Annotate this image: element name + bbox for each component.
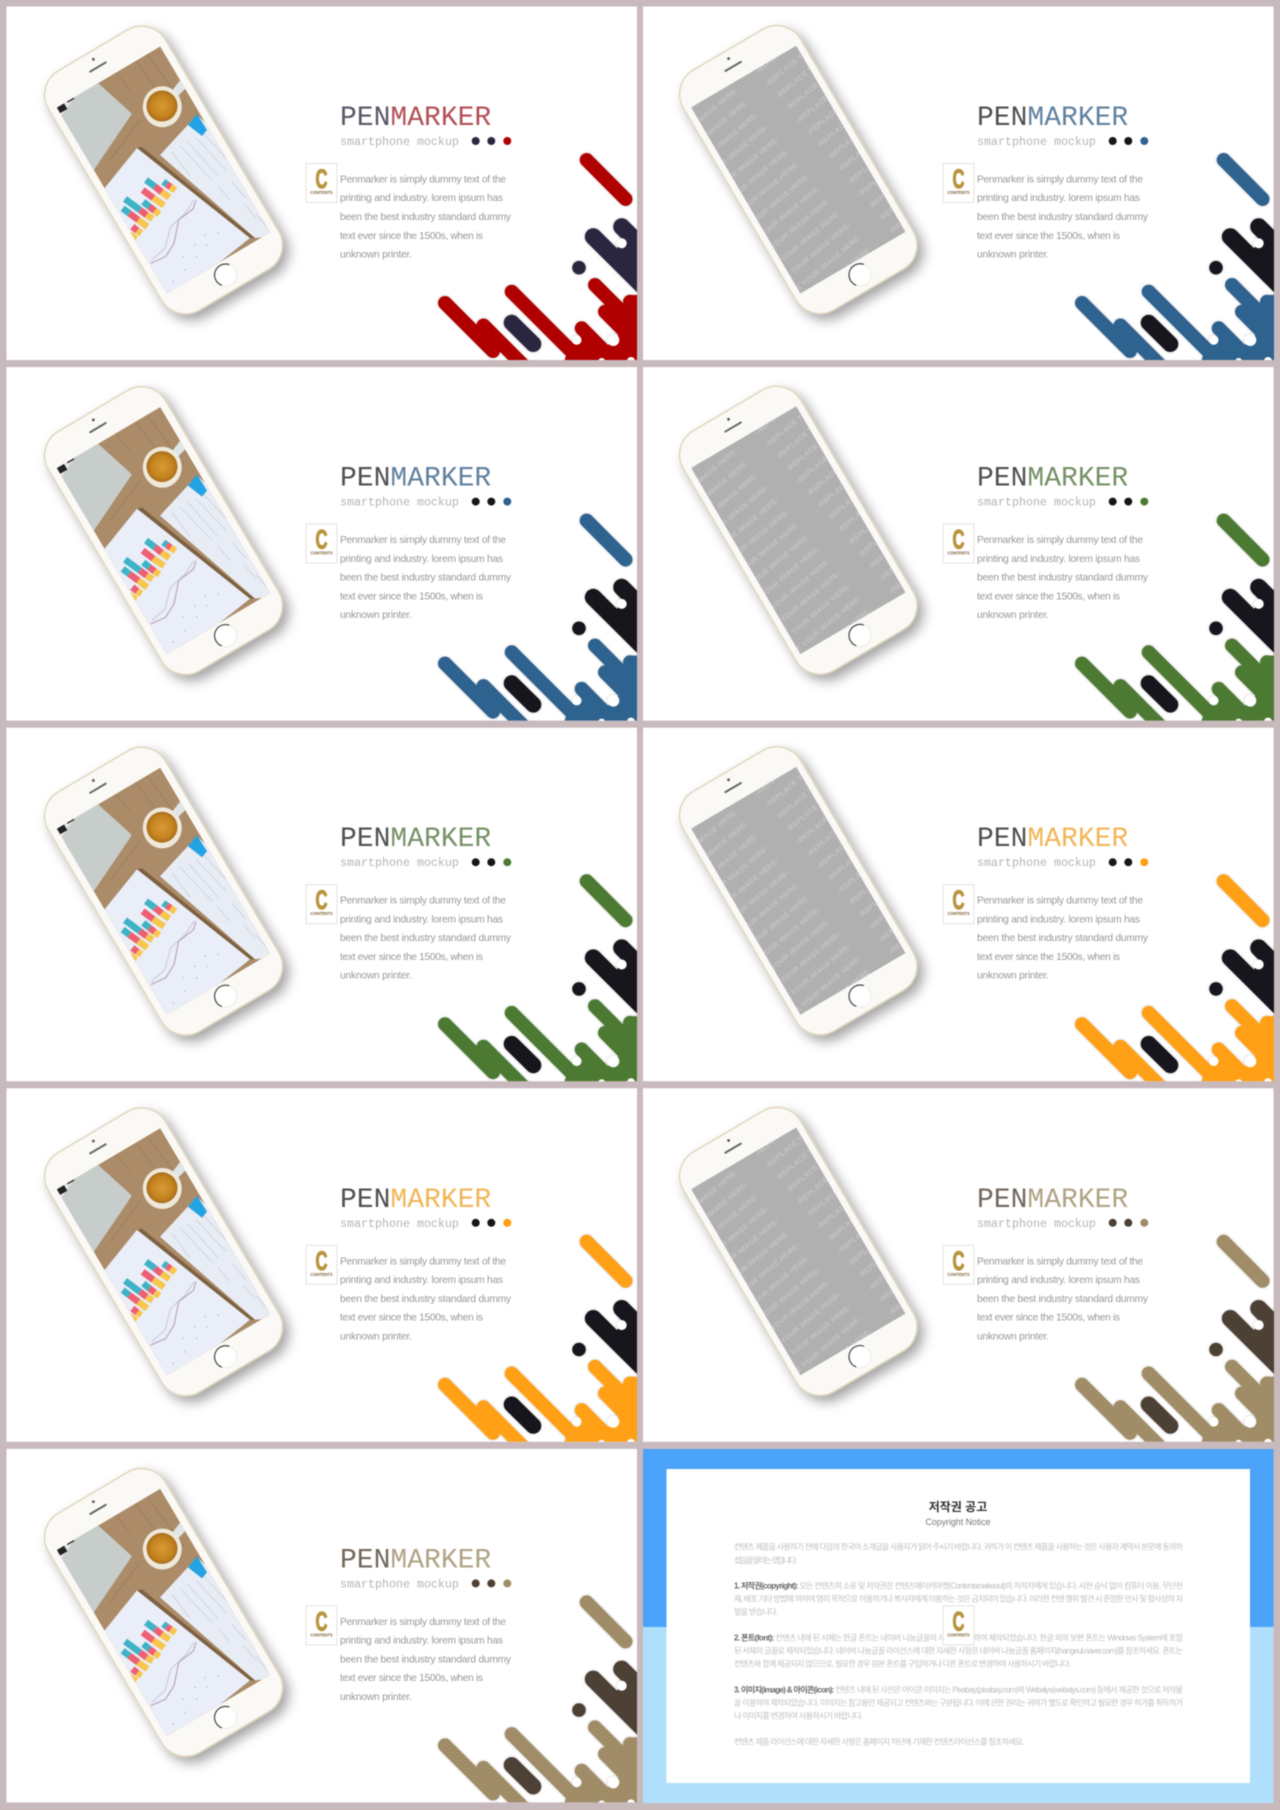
phone with photo [34, 16, 293, 324]
phone with placeholder screen: -REPLACE YOUR IMAGE HERE- [655, 1179, 750, 1261]
logo: CONTENTS [948, 1272, 970, 1277]
phone with placeholder screen: -REPLACE YOUR IMAGE HERE- [897, 887, 993, 969]
title: PENMARKER [340, 824, 491, 855]
body text: unknown printer. [340, 1692, 412, 1703]
body text: text ever since the 1500s, when is [340, 952, 483, 963]
copyright intro [734, 1542, 1184, 1565]
phone with placeholder screen: -REPLACE YOUR IMAGE HERE- [856, 477, 951, 559]
phone with placeholder screen: -REPLACE YOUR IMAGE HERE- [815, 789, 910, 871]
phone with placeholder screen: -REPLACE YOUR IMAGE HERE- [686, 1216, 781, 1298]
logo: CONTENTS [948, 911, 970, 916]
phone with placeholder screen: -REPLACE YOUR IMAGE HERE- [778, 244, 874, 327]
body text: text ever since the 1500s, when is [977, 1313, 1120, 1324]
section 1 copyright [734, 1580, 1183, 1616]
body text: printing and industry. lorem ipsum has [340, 914, 503, 925]
decorative pen strokes [445, 521, 671, 736]
phone with placeholder screen: -REPLACE YOUR IMAGE HERE- [634, 794, 730, 876]
logo [306, 1245, 337, 1284]
phone with placeholder screen: -REPLACE YOUR IMAGE HERE- [675, 1204, 771, 1286]
phone with placeholder screen: -REPLACE YOUR IMAGE HERE- [887, 514, 982, 596]
phone with placeholder screen: -REPLACE YOUR IMAGE HERE- [768, 593, 863, 675]
subtitle: smartphone mockup [340, 135, 459, 149]
phone with placeholder screen: -REPLACE YOUR IMAGE HERE- [655, 458, 750, 540]
phone with placeholder screen: -REPLACE YOUR IMAGE HERE- [877, 862, 972, 944]
phone with placeholder screen: -REPLACE YOUR IMAGE HERE- [825, 801, 921, 883]
body text: printing and industry. lorem ipsum has [977, 554, 1140, 565]
body text: Penmarker is simply dummy text of the [340, 1256, 506, 1267]
phone with placeholder screen: -REPLACE YOUR IMAGE HERE- [778, 966, 874, 1048]
phone with placeholder screen: -REPLACE YOUR IMAGE HERE- [768, 953, 863, 1036]
phone with placeholder screen: -REPLACE YOUR IMAGE HERE- [696, 868, 791, 950]
logo: CONTENTS [310, 1272, 332, 1277]
colour dots [1109, 137, 1148, 145]
phone with placeholder screen: -REPLACE YOUR IMAGE HERE- [877, 1223, 972, 1305]
phone with placeholder screen: -REPLACE YOUR IMAGE HERE- [757, 581, 853, 663]
section 1 copyright: 재, 배포 기타 방법에 의하여 영리 목적으로 이용하거나 복사자에게 이용하는 것은 금지되어 있습니다. 이러한 컨텐 행위 발견 시 준엄한 민사 및 형사상의 처 [734, 1594, 1183, 1604]
panel: copyright notice [643, 1449, 1274, 1803]
title: PENMARKER [340, 1545, 491, 1576]
phone with placeholder screen: -REPLACE YOUR IMAGE HERE- [763, 367, 859, 449]
body text: been the best industry standard dummy [340, 573, 512, 584]
body text: text ever since the 1500s, when is [340, 231, 483, 242]
body text: been the best industry standard dummy [340, 1294, 512, 1305]
phone with placeholder screen: -REPLACE YOUR IMAGE HERE- [727, 183, 822, 265]
logo: C [952, 525, 964, 555]
phone with placeholder screen: -REPLACE YOUR IMAGE HERE- [877, 502, 972, 584]
body text [340, 896, 512, 982]
body text: unknown printer. [340, 250, 412, 260]
body text: unknown printer. [340, 610, 412, 621]
colour dots [472, 858, 511, 866]
phone with placeholder screen: -REPLACE YOUR IMAGE HERE- [727, 1265, 822, 1347]
body text: printing and industry. lorem ipsum has [340, 554, 503, 565]
section 3 image and icon: 을 이용하여 제작되었습니다. 이미지는 참고용만 제공되고 컨텐츠와는 구분됩니다. 이에 관한 권리는 귀하가 별도로 확인하고 필요한 경우 허가를 취득하거 [734, 1698, 1183, 1708]
panel: slide 3 blue photo [6, 367, 671, 736]
logo [943, 1245, 974, 1284]
logo: C [316, 1246, 328, 1276]
phone with placeholder screen: -REPLACE YOUR IMAGE HERE- [696, 146, 791, 229]
section 1 copyright: 1. 저작권(copyright): 모든 컨텐츠의 소유 및 저작권은 컨텐츠메이커마켓(Contentsmakeout)의 저작자에게 있습니다. 사전 승낙 없이 컴퓨터 이용, 무단전 [734, 1580, 1183, 1590]
subtitle: smartphone mockup [977, 856, 1096, 870]
phone with placeholder screen: -REPLACE YOUR IMAGE HERE- [784, 31, 879, 113]
body text: been the best industry standard dummy [977, 933, 1149, 944]
phone with placeholder screen: -REPLACE YOUR IMAGE HERE- [763, 727, 859, 809]
panel: slide 5 green photo [6, 728, 671, 1096]
body text [977, 896, 1149, 982]
phone with photo [34, 376, 293, 685]
phone with placeholder screen: -REPLACE YOUR IMAGE HERE- [665, 1191, 760, 1274]
logo [943, 885, 974, 924]
phone with placeholder screen: -REPLACE YOUR IMAGE HERE- [644, 1167, 740, 1249]
body text [977, 174, 1149, 260]
phone with placeholder screen: -REPLACE YOUR IMAGE HERE- [778, 605, 874, 687]
body text [977, 535, 1149, 621]
body text [340, 1617, 512, 1703]
phone with placeholder screen: -REPLACE YOUR IMAGE HERE- [877, 141, 972, 223]
phone with placeholder screen: -REPLACE YOUR IMAGE HERE- [747, 929, 843, 1011]
logo: CONTENTS [310, 190, 332, 195]
decorative pen strokes [445, 160, 671, 375]
phone with placeholder screen: -REPLACE YOUR IMAGE HERE- [784, 1112, 879, 1195]
phone with placeholder screen: -REPLACE YOUR IMAGE HERE- [788, 978, 884, 1060]
phone with placeholder screen: -REPLACE YOUR IMAGE HERE- [686, 495, 781, 577]
phone with placeholder screen: -REPLACE YOUR IMAGE HERE- [757, 1302, 853, 1384]
body text [340, 535, 512, 621]
logo: CONTENTS [310, 551, 332, 556]
body text: been the best industry standard dummy [977, 1294, 1149, 1305]
phone with placeholder screen: -REPLACE YOUR IMAGE HERE- [778, 1326, 874, 1408]
title: PENMARKER [340, 103, 491, 134]
body text: printing and industry. lorem ipsum has [977, 1275, 1140, 1286]
phone with placeholder screen: -REPLACE YOUR IMAGE HERE- [686, 855, 781, 938]
phone with placeholder screen: -REPLACE YOUR IMAGE HERE- [675, 482, 771, 565]
phone with placeholder screen: -REPLACE YOUR IMAGE HERE- [805, 55, 900, 137]
body text: printing and industry. lorem ipsum has [340, 1636, 503, 1647]
phone with placeholder screen: -REPLACE YOUR IMAGE HERE- [788, 617, 884, 699]
phone with placeholder screen: -REPLACE YOUR IMAGE HERE- [784, 752, 879, 834]
body text: text ever since the 1500s, when is [977, 952, 1120, 963]
phone with placeholder screen: -REPLACE YOUR IMAGE HERE- [753, 1076, 849, 1158]
body text: unknown printer. [977, 610, 1049, 621]
title: PENMARKER [977, 103, 1128, 134]
phone with placeholder screen: -REPLACE YOUR IMAGE HERE- [856, 1198, 951, 1280]
subtitle: smartphone mockup [340, 856, 459, 870]
phone with placeholder screen: -REPLACE YOUR IMAGE HERE- [815, 67, 910, 150]
phone with placeholder screen: -REPLACE YOUR IMAGE HERE- [757, 941, 853, 1023]
subtitle: smartphone mockup [977, 1217, 1096, 1231]
logo [943, 164, 974, 202]
phone with placeholder screen: -REPLACE YOUR IMAGE HERE- [727, 544, 822, 626]
phone with placeholder screen: -REPLACE YOUR IMAGE HERE- [815, 428, 910, 510]
phone with placeholder screen: -REPLACE YOUR IMAGE HERE- [805, 776, 900, 858]
phone with placeholder screen: -REPLACE YOUR IMAGE HERE- [846, 465, 941, 547]
phone with placeholder screen: -REPLACE YOUR IMAGE HERE- [665, 831, 760, 913]
copyright subheading: Copyright Notice [925, 1517, 991, 1527]
body text: Penmarker is simply dummy text of the [977, 1256, 1143, 1267]
body text: Penmarker is simply dummy text of the [340, 535, 506, 546]
body text: been the best industry standard dummy [977, 573, 1149, 584]
phone with placeholder screen: -REPLACE YOUR IMAGE HERE- [737, 195, 832, 278]
phone with placeholder screen: -REPLACE YOUR IMAGE HERE- [737, 556, 832, 638]
phone with placeholder screen: -REPLACE YOUR IMAGE HERE- [675, 843, 771, 925]
phone with placeholder screen: -REPLACE YOUR IMAGE HERE- [866, 489, 962, 571]
phone with placeholder screen: -REPLACE YOUR IMAGE HERE- [794, 403, 890, 486]
closing note: 컨텐츠 제품 라이선스에 대한 자세한 사항은 홈페이지 하단에 기재한 컨텐츠라이선스를 참조하세요. [734, 1736, 1024, 1746]
phone with placeholder screen: -REPLACE YOUR IMAGE HERE- [887, 153, 982, 235]
decorative pen strokes [1082, 1242, 1280, 1457]
logo: C [316, 164, 328, 194]
phone with placeholder screen: -REPLACE YOUR IMAGE HERE- [727, 904, 822, 987]
decorative pen strokes [1082, 160, 1280, 375]
phone with placeholder screen: -REPLACE YOUR IMAGE HERE- [763, 6, 859, 88]
section 2 font: 컨텐츠와 함께 제공되지 않으므로, 필요한 경우 원본 폰트를 구입하거나 다른 폰트로 변경하여 사용하시기 바랍니다. [734, 1658, 1071, 1668]
colour dots [1109, 858, 1148, 866]
phone with placeholder screen: -REPLACE YOUR IMAGE HERE- [794, 1125, 890, 1207]
phone with placeholder screen: -REPLACE YOUR IMAGE HERE- [634, 73, 730, 155]
phone with placeholder screen: -REPLACE YOUR IMAGE HERE- [753, 354, 849, 437]
phone with placeholder screen: -REPLACE YOUR IMAGE HERE- [887, 1235, 982, 1317]
logo [943, 1606, 974, 1645]
phone with placeholder screen: -REPLACE YOUR IMAGE HERE- [716, 1253, 812, 1335]
logo: C [316, 885, 328, 915]
phone with placeholder screen: -REPLACE YOUR IMAGE HERE- [835, 1174, 931, 1256]
logo: CONTENTS [948, 1632, 970, 1637]
body text: Penmarker is simply dummy text of the [977, 896, 1143, 907]
phone with placeholder screen: -REPLACE YOUR IMAGE HERE- [866, 850, 962, 932]
panel: slide 2 blue placeholder [642, 6, 1275, 361]
colour dots [472, 137, 511, 145]
logo: CONTENTS [948, 551, 970, 556]
phone with placeholder screen [678, 1106, 930, 1409]
phone with placeholder screen: -REPLACE YOUR IMAGE HERE- [743, 1063, 838, 1146]
logo [306, 885, 337, 924]
phone with placeholder screen: -REPLACE YOUR IMAGE HERE- [774, 379, 869, 461]
body text: Penmarker is simply dummy text of the [340, 174, 506, 186]
panel: slide 8 tan placeholder [642, 1088, 1275, 1442]
decorative pen strokes [445, 1242, 671, 1457]
phone with photo [34, 1458, 293, 1767]
body text: Penmarker is simply dummy text of the [977, 174, 1143, 186]
phone with photo [34, 1098, 293, 1406]
phone with placeholder screen: -REPLACE YOUR IMAGE HERE- [866, 129, 962, 211]
phone with placeholder screen: -REPLACE YOUR IMAGE HERE- [665, 110, 760, 192]
phone with placeholder screen: -REPLACE YOUR IMAGE HERE- [768, 232, 863, 314]
phone with placeholder screen: -REPLACE YOUR IMAGE HERE- [835, 453, 931, 535]
title: PENMARKER [977, 824, 1128, 855]
phone with placeholder screen: -REPLACE YOUR IMAGE HERE- [846, 104, 941, 186]
body text: printing and industry. lorem ipsum has [977, 914, 1140, 925]
subtitle: smartphone mockup [340, 1217, 459, 1231]
decorative pen strokes [1082, 521, 1280, 736]
phone with placeholder screen: -REPLACE YOUR IMAGE HERE- [897, 1247, 993, 1329]
phone with placeholder screen: -REPLACE YOUR IMAGE HERE- [784, 391, 879, 473]
copyright intro: 셨음을 알리는 것입니다. [734, 1555, 797, 1565]
phone with placeholder screen: -REPLACE YOUR IMAGE HERE- [805, 1137, 900, 1219]
section 2 font: 2. 폰트(font): 컨텐츠 내에 된 서체는 한글 폰트는 네이버 나눔글꼴의 서체를 사용하여 제작되었습니다. 한글 외의 보편 폰트는 Windows System에 포함 [734, 1632, 1184, 1642]
phone with placeholder screen: -REPLACE YOUR IMAGE HERE- [737, 917, 832, 999]
decorative pen strokes [1082, 881, 1280, 1096]
phone with placeholder screen [678, 384, 930, 688]
logo: CONTENTS [310, 1632, 332, 1637]
colour dots [1109, 498, 1148, 506]
body text: unknown printer. [977, 971, 1049, 982]
phone with placeholder screen: -REPLACE YOUR IMAGE HERE- [856, 838, 951, 920]
phone with placeholder screen: -REPLACE YOUR IMAGE HERE- [686, 134, 781, 216]
body text: printing and industry. lorem ipsum has [977, 193, 1140, 204]
body text: text ever since the 1500s, when is [340, 1313, 483, 1324]
phone with placeholder screen: -REPLACE YOUR IMAGE HERE- [634, 433, 730, 516]
body text: been the best industry standard dummy [340, 212, 512, 223]
phone with placeholder screen: -REPLACE YOUR IMAGE HERE- [794, 43, 890, 125]
phone with placeholder screen: -REPLACE YOUR IMAGE HERE- [747, 1289, 843, 1372]
phone with placeholder screen: -REPLACE YOUR IMAGE HERE- [757, 220, 853, 302]
copyright intro: 컨텐츠 제품을 사용하기 전에 다음의 한국어 소개글을 사용자가 읽어 주시기 바랍니다. 귀하가 이 컨텐츠 제품을 사용하는 것은 사용자 계약서 본문에 동의하 [734, 1542, 1184, 1552]
body text: Penmarker is simply dummy text of the [340, 896, 506, 907]
panel: slide 1 red photo [6, 6, 671, 375]
body text [340, 1256, 512, 1342]
body text: printing and industry. lorem ipsum has [340, 1275, 503, 1286]
phone with placeholder screen: -REPLACE YOUR IMAGE HERE- [774, 18, 869, 101]
logo: C [952, 1246, 964, 1276]
phone with photo [34, 737, 293, 1045]
phone with placeholder screen: -REPLACE YOUR IMAGE HERE- [794, 764, 890, 846]
phone with placeholder screen: -REPLACE YOUR IMAGE HERE- [866, 1210, 962, 1293]
body text: unknown printer. [340, 971, 412, 982]
subtitle: smartphone mockup [340, 1577, 459, 1591]
title: PENMARKER [977, 464, 1128, 495]
subtitle: smartphone mockup [977, 135, 1096, 149]
phone with placeholder screen: -REPLACE YOUR IMAGE HERE- [716, 532, 812, 614]
phone with placeholder screen: -REPLACE YOUR IMAGE HERE- [825, 80, 921, 162]
body text: been the best industry standard dummy [340, 1654, 512, 1665]
phone with placeholder screen: -REPLACE YOUR IMAGE HERE- [634, 1155, 730, 1237]
phone with placeholder screen: -REPLACE YOUR IMAGE HERE- [696, 507, 791, 589]
phone with placeholder screen: -REPLACE YOUR IMAGE HERE- [706, 159, 802, 241]
body text: printing and industry. lorem ipsum has [340, 193, 503, 204]
phone with placeholder screen: -REPLACE YOUR IMAGE HERE- [753, 715, 849, 797]
phone with placeholder screen: -REPLACE YOUR IMAGE HERE- [788, 1339, 884, 1421]
logo: C [316, 1606, 328, 1636]
phone with placeholder screen: -REPLACE YOUR IMAGE HERE- [747, 208, 843, 290]
phone with placeholder screen: -REPLACE YOUR IMAGE HERE- [644, 806, 740, 888]
panel: slide 6 orange placeholder [642, 727, 1275, 1082]
logo: CONTENTS [948, 190, 970, 195]
phone with placeholder screen [678, 745, 930, 1048]
panel: slide 9 tan photo [6, 1449, 671, 1810]
phone with placeholder screen: -REPLACE YOUR IMAGE HERE- [774, 1100, 869, 1182]
phone with placeholder screen: -REPLACE YOUR IMAGE HERE- [655, 819, 750, 901]
logo: C [952, 164, 964, 194]
body text [977, 1256, 1149, 1342]
phone with placeholder screen: -REPLACE YOUR IMAGE HERE- [815, 1149, 910, 1231]
panel: slide 4 green placeholder [642, 366, 1275, 722]
decorative pen strokes [445, 881, 671, 1096]
body text: been the best industry standard dummy [340, 933, 512, 944]
logo: C [952, 1606, 964, 1636]
phone with placeholder screen: -REPLACE YOUR IMAGE HERE- [644, 446, 740, 528]
section 1 copyright: 벌을 받습니다. [734, 1606, 778, 1616]
phone with placeholder screen: -REPLACE YOUR IMAGE HERE- [846, 825, 941, 908]
logo [306, 524, 337, 563]
phone with placeholder screen: -REPLACE YOUR IMAGE HERE- [856, 116, 951, 199]
phone with placeholder screen: -REPLACE YOUR IMAGE HERE- [768, 1314, 863, 1396]
body text: text ever since the 1500s, when is [340, 1673, 483, 1684]
colour dots [472, 1219, 511, 1227]
subtitle: smartphone mockup [977, 496, 1096, 510]
phone with placeholder screen: -REPLACE YOUR IMAGE HERE- [825, 440, 921, 522]
logo: C [316, 525, 328, 555]
phone with placeholder screen: -REPLACE YOUR IMAGE HERE- [743, 703, 838, 785]
body text: unknown printer. [340, 1331, 412, 1342]
colour dots [1109, 1219, 1148, 1227]
phone with placeholder screen: -REPLACE YOUR IMAGE HERE- [763, 1088, 859, 1170]
phone with placeholder screen: -REPLACE YOUR IMAGE HERE- [805, 416, 900, 498]
section 2 font: 된 서체의 글꼴로 제작되었습니다. 네이버 나눔글꼴 라이선스에 대한 자세한 사항은 네이버 나눔글꼴 홈페이지(hangeul.naver.com)를 참조하세요. 폰트는 [734, 1646, 1183, 1656]
body text: text ever since the 1500s, when is [977, 231, 1120, 242]
title: PENMARKER [977, 1185, 1128, 1216]
phone with placeholder screen: -REPLACE YOUR IMAGE HERE- [696, 1228, 791, 1310]
phone with placeholder screen: -REPLACE YOUR IMAGE HERE- [655, 97, 750, 180]
body text [340, 174, 512, 260]
title: PENMARKER [340, 1185, 491, 1216]
section 3 image and icon: 나 이미지를 변경하여 사용하시기 바랍니다. [734, 1710, 863, 1720]
section 3 image and icon [734, 1684, 1183, 1720]
phone with placeholder screen: -REPLACE YOUR IMAGE HERE- [665, 470, 760, 552]
decorative pen strokes [445, 1602, 671, 1810]
subtitle: smartphone mockup [340, 496, 459, 510]
body text: unknown printer. [977, 1331, 1049, 1342]
phone with placeholder screen: -REPLACE YOUR IMAGE HERE- [675, 122, 771, 204]
phone with placeholder screen: -REPLACE YOUR IMAGE HERE- [835, 813, 931, 895]
body text: unknown printer. [977, 250, 1049, 260]
phone with placeholder screen [678, 24, 930, 328]
phone with placeholder screen: -REPLACE YOUR IMAGE HERE- [706, 1240, 802, 1323]
title: PENMARKER [340, 464, 491, 495]
logo: CONTENTS [310, 911, 332, 916]
body text: Penmarker is simply dummy text of the [340, 1617, 506, 1628]
panel: slide 7 orange photo [6, 1088, 671, 1457]
logo [306, 164, 337, 202]
section 3 image and icon: 3. 이미지(image) & 아이콘(icon): 컨텐츠 내에 된 사진은 아이콘 이미지는 Pixabay(pixabay.com)와 Webalys(webalys.com) 등에서 제공한 것으로 저작물 [734, 1684, 1183, 1694]
phone with placeholder screen: -REPLACE YOUR IMAGE HERE- [706, 519, 802, 601]
body text: Penmarker is simply dummy text of the [977, 535, 1143, 546]
phone with placeholder screen: -REPLACE YOUR IMAGE HERE- [743, 342, 838, 424]
phone with placeholder screen: -REPLACE YOUR IMAGE HERE- [825, 1161, 921, 1244]
logo: C [952, 885, 964, 915]
phone with placeholder screen: -REPLACE YOUR IMAGE HERE- [835, 92, 931, 174]
body text: text ever since the 1500s, when is [977, 591, 1120, 602]
phone with placeholder screen: -REPLACE YOUR IMAGE HERE- [774, 740, 869, 822]
colour dots [472, 498, 511, 506]
colour dots [472, 1579, 511, 1587]
body text: text ever since the 1500s, when is [340, 591, 483, 602]
phone with placeholder screen: -REPLACE YOUR IMAGE HERE- [737, 1277, 832, 1359]
section 2 font [734, 1632, 1184, 1668]
phone with placeholder screen: -REPLACE YOUR IMAGE HERE- [897, 165, 993, 248]
copyright heading: 저작권 공고 [929, 1499, 987, 1514]
phone with placeholder screen: -REPLACE YOUR IMAGE HERE- [747, 568, 843, 650]
phone with placeholder screen: -REPLACE YOUR IMAGE HERE- [788, 257, 884, 339]
phone with placeholder screen: -REPLACE YOUR IMAGE HERE- [706, 880, 802, 962]
phone with placeholder screen: -REPLACE YOUR IMAGE HERE- [887, 874, 982, 957]
logo [943, 524, 974, 563]
phone with placeholder screen: -REPLACE YOUR IMAGE HERE- [644, 85, 740, 167]
phone with placeholder screen: -REPLACE YOUR IMAGE HERE- [716, 892, 812, 974]
phone with placeholder screen: -REPLACE YOUR IMAGE HERE- [897, 526, 993, 608]
phone with placeholder screen: -REPLACE YOUR IMAGE HERE- [846, 1186, 941, 1268]
logo [306, 1606, 337, 1645]
body text: been the best industry standard dummy [977, 212, 1149, 223]
phone with placeholder screen: -REPLACE YOUR IMAGE HERE- [716, 171, 812, 253]
